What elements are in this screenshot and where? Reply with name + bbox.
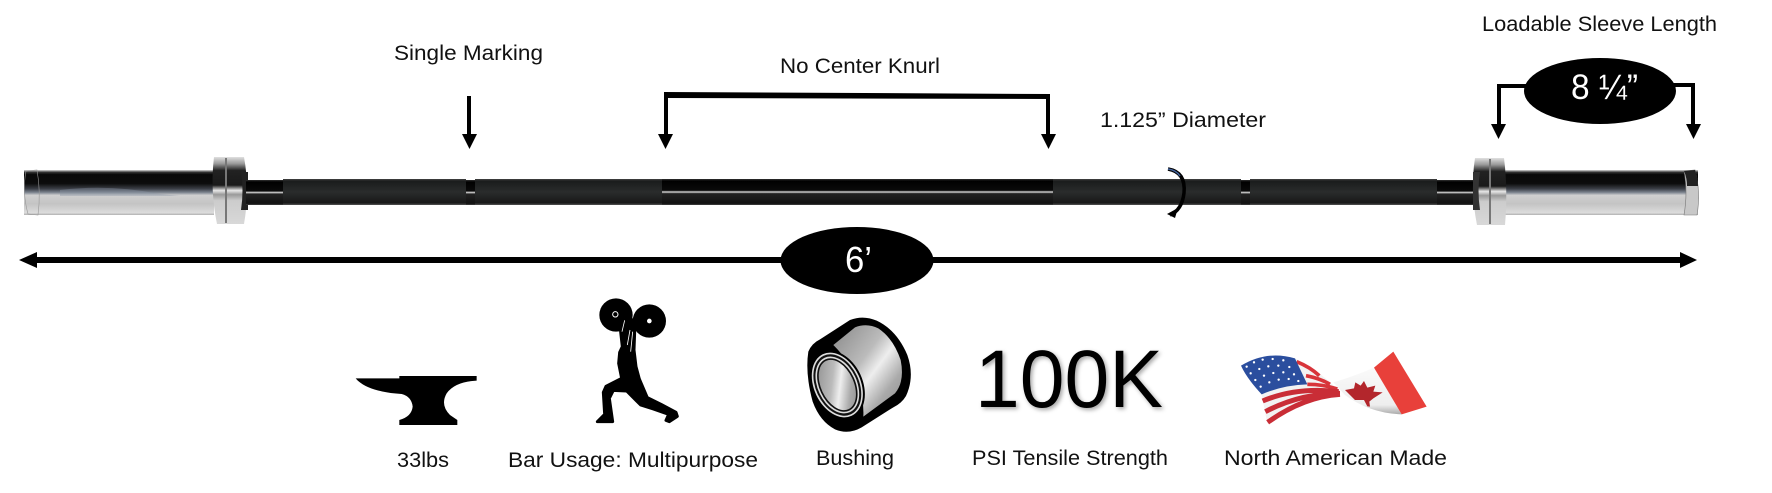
icon: rotation arrow [1167, 169, 1184, 218]
label: bar usage: Bar Usage: Multipurpose [508, 449, 758, 472]
badge: overall length [780, 227, 934, 294]
right sleeve [1504, 170, 1699, 215]
right shaft end [1437, 180, 1475, 205]
label: bushing: Bushing [816, 447, 894, 470]
stat: 100K: 100K [975, 334, 1163, 425]
icon: bushing [799, 318, 911, 432]
label: diameter: 1.125” Diameter [1100, 109, 1266, 132]
right ring marking [1241, 180, 1250, 205]
label: loadable sleeve length: Loadable Sleeve Length [1482, 13, 1717, 36]
left collar [213, 157, 248, 224]
icon: anvil [356, 376, 477, 425]
barbell [24, 157, 1699, 225]
right knurl [1250, 179, 1437, 205]
dimension arrow: overall length [19, 252, 1697, 268]
badge: sleeve length: 8 ¼” [1571, 68, 1638, 107]
inner right knurl [1053, 179, 1241, 205]
left sleeve [24, 170, 214, 215]
left knurl [283, 179, 466, 205]
label: single marking: Single Marking [394, 42, 543, 65]
badge: sleeve length [1524, 58, 1676, 124]
icon: flags [1241, 352, 1427, 423]
bracket arrow: no center knurl [658, 92, 1056, 149]
label: north american made: North American Made [1224, 447, 1447, 470]
icon: weightlifter [597, 298, 677, 422]
right collar [1473, 158, 1506, 225]
label: no center knurl: No Center Knurl [780, 55, 940, 78]
arrow: single marking [462, 96, 477, 149]
label: tensile strength: PSI Tensile Strength [972, 447, 1168, 470]
left shaft end [246, 180, 283, 205]
inner left knurl [475, 179, 662, 205]
bracket arrow: sleeve length [1491, 83, 1701, 139]
badge: overall length: 6’ [845, 239, 872, 280]
smooth center [662, 179, 1053, 205]
label: weight: 33lbs [397, 449, 449, 472]
left ring marking [466, 180, 475, 205]
